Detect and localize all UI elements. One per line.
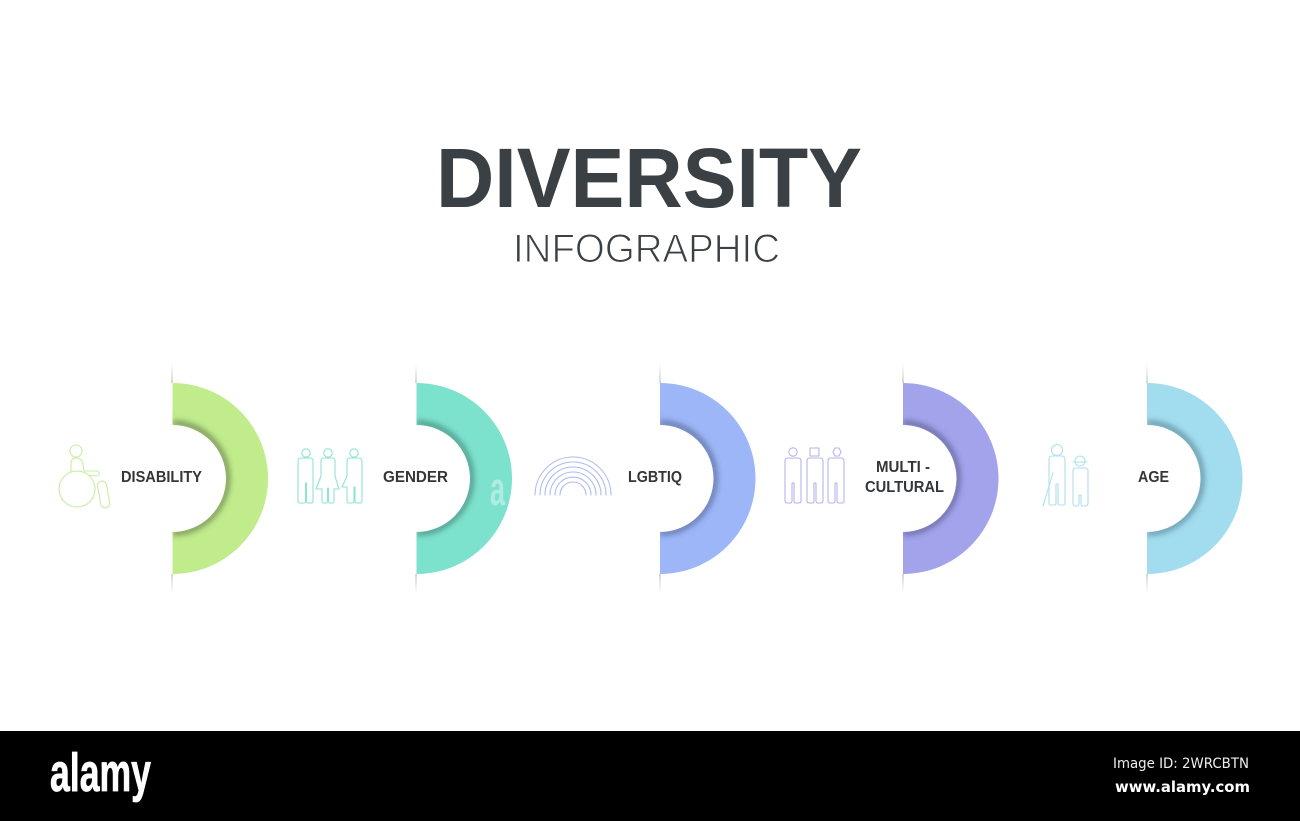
panel: age <box>1043 363 1242 594</box>
panel: lgbtiq <box>535 363 756 594</box>
label: MULTI - CULTURAL: CULTURAL <box>865 479 944 496</box>
divider line bottom <box>172 574 173 594</box>
subtitle: INFOGRAPHIC: INFOGRAPHIC <box>513 227 780 271</box>
divider line bottom <box>660 574 661 594</box>
divider line top <box>172 363 173 383</box>
divider line top <box>902 363 904 383</box>
title: DIVERSITY: DIVERSITY <box>436 131 862 225</box>
half ring: purple <box>903 383 998 574</box>
website: www.alamy.com <box>1115 778 1250 796</box>
panel: multi-cultural <box>785 363 998 594</box>
half ring: teal <box>416 383 512 574</box>
divider line bottom <box>902 574 904 594</box>
half ring: green <box>172 383 268 574</box>
divider line top <box>1146 363 1148 383</box>
label: MULTI - CULTURAL <box>865 459 944 496</box>
label: MULTI - CULTURAL: MULTI - <box>876 459 930 476</box>
label: AGE: AGE <box>1138 469 1169 486</box>
icon: rainbow <box>535 457 611 495</box>
footer background <box>0 731 1300 821</box>
watermark glyph: a <box>490 462 505 515</box>
panel: disability <box>59 363 268 594</box>
divider line bottom <box>416 574 417 594</box>
divider line top <box>416 363 417 383</box>
icon: three gender figures <box>298 449 362 503</box>
divider line top <box>660 363 661 383</box>
label: GENDER: GENDER <box>383 469 448 486</box>
panel: gender <box>298 363 512 594</box>
divider line bottom <box>1146 574 1148 594</box>
footer band <box>0 731 1300 821</box>
icon: elder with cane and child <box>1043 444 1088 506</box>
half ring: blue <box>660 383 756 574</box>
icon: three figures with different heads <box>785 448 844 503</box>
label: DISABILITY: DISABILITY <box>121 469 202 486</box>
logo: alamy: alamy <box>50 743 151 803</box>
icon: wheelchair user <box>59 445 110 508</box>
half ring: light blue <box>1147 383 1242 574</box>
label: LGBTIQ: LGBTIQ <box>628 469 682 486</box>
image id: Image ID: 2WRCBTN <box>1113 756 1249 772</box>
